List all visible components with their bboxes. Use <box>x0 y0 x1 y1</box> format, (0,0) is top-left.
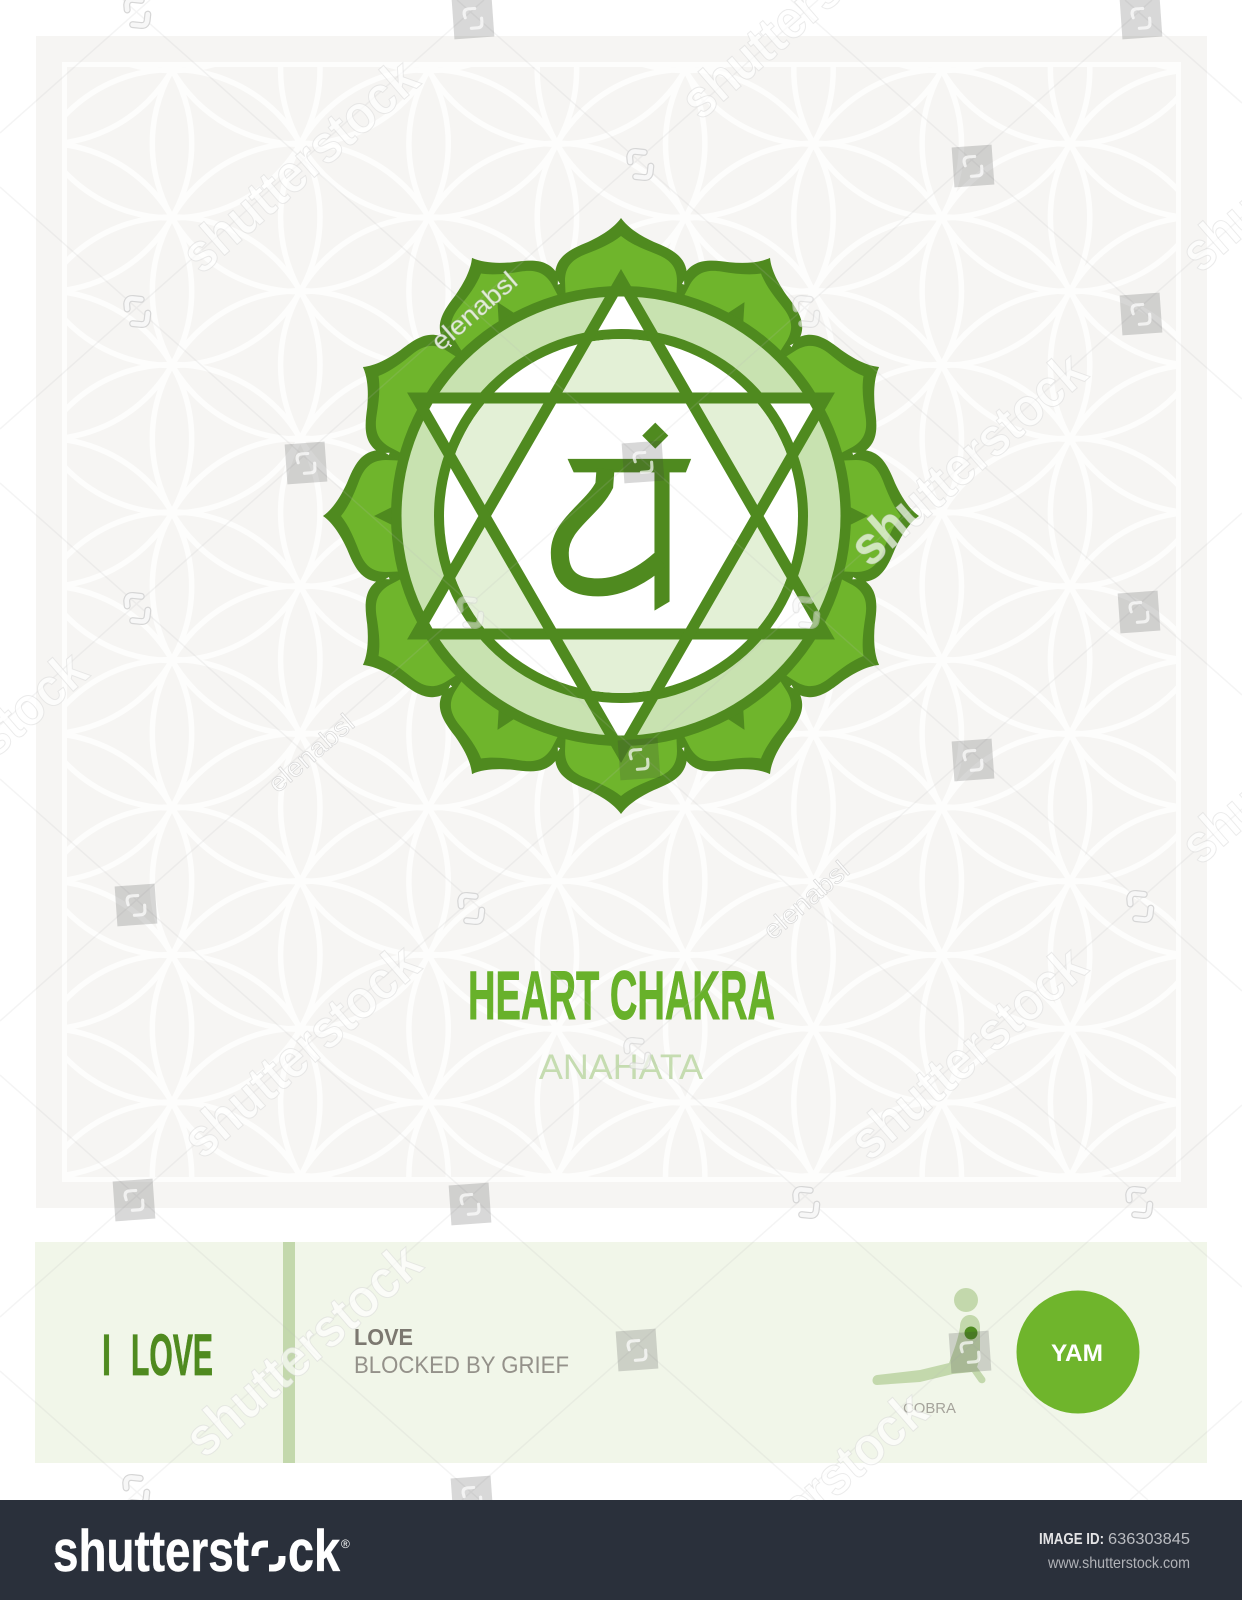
text: love blocked by grief: LOVE <box>354 1324 413 1350</box>
label: Cobra: COBRA <box>903 1400 956 1417</box>
outer ring <box>391 280 851 752</box>
affirmation: I love <box>102 1323 213 1388</box>
watermark overlay: shutterstock <box>838 934 1099 1171</box>
text: love blocked by grief <box>354 1324 569 1379</box>
watermark overlay: shutterstock <box>838 340 1099 577</box>
lotus petals <box>323 218 919 814</box>
logo: shutterstock: ck <box>288 1519 341 1584</box>
image id <box>1039 1531 1190 1548</box>
logo: shutterstock: ® <box>341 1537 350 1551</box>
watermark overlay: elenabsl <box>262 708 360 798</box>
logo: shutterstock: shutterst <box>53 1519 249 1584</box>
watermark overlay: shutterstock <box>173 1231 434 1468</box>
heading: Heart Chakra: HEART CHAKRA <box>468 957 775 1034</box>
watermark overlay: elenabsl <box>425 266 523 356</box>
badge: Yam mantra: YAM <box>1051 1340 1103 1367</box>
subheading: Anahata: ANAHATA <box>539 1048 704 1087</box>
website url: www.shutterstock.com <box>1047 1555 1190 1572</box>
panel: flower of life background <box>36 36 1207 1208</box>
icon: heart chakra mandala <box>323 218 919 814</box>
affirmation: I love: LOVE <box>131 1323 213 1388</box>
footer bar <box>0 1500 1242 1600</box>
watermark overlay: shutterstock <box>170 47 431 284</box>
image id: IMAGE ID: <box>1039 1531 1104 1548</box>
panel: info strip <box>35 1242 1207 1463</box>
affirmation: I love: I <box>102 1323 111 1388</box>
watermark overlay: elenabsl <box>757 855 855 945</box>
badge: Yam mantra <box>1016 1290 1140 1414</box>
image id: 636303845 <box>1108 1531 1190 1548</box>
star of two triangles <box>417 280 825 752</box>
icon: yam bija glyph <box>560 423 691 611</box>
text: love blocked by grief: BLOCKED BY GRIEF <box>354 1352 569 1379</box>
watermark overlay: shutterstock <box>171 932 432 1169</box>
icon: cobra pose <box>872 1288 985 1385</box>
